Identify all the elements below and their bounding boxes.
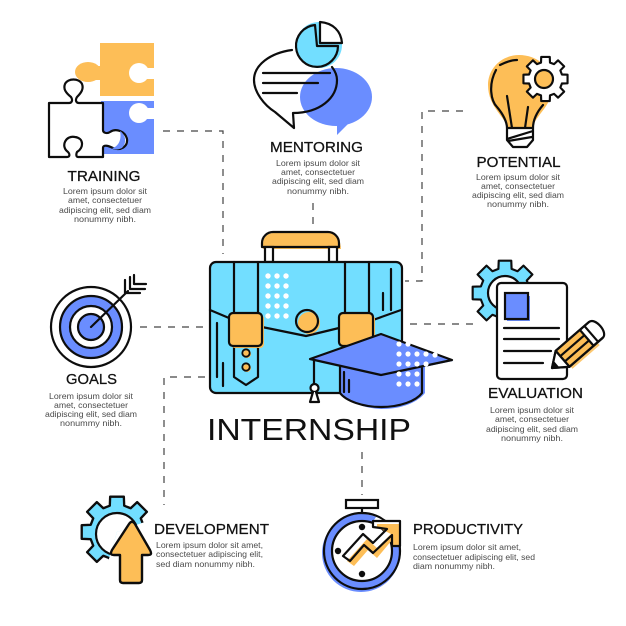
text: development body xyxy=(156,540,263,569)
connector: goals to briefcase xyxy=(140,326,205,328)
text: mentoring body: adipiscing elit, sed diam xyxy=(272,176,364,186)
heading: potential: POTENTIAL xyxy=(476,155,560,171)
connector: training to briefcase xyxy=(163,131,223,254)
heading: evaluation: EVALUATION xyxy=(488,386,583,402)
heading: mentoring: MENTORING xyxy=(270,140,363,156)
text: goals body: adipiscing elit, sed diam xyxy=(45,409,137,419)
connector: mentoring to briefcase xyxy=(312,203,314,228)
text: potential body xyxy=(472,172,564,209)
text: goals body: Lorem ipsum dolor sit xyxy=(49,391,134,401)
connector: productivity to title xyxy=(361,452,363,495)
heading: training: TRAINING xyxy=(68,169,140,185)
icon: training puzzle xyxy=(49,43,155,157)
text: training body: nonummy nibh. xyxy=(74,214,136,224)
text: mentoring body: amet, consectetuer xyxy=(281,167,355,177)
text: potential body: adipiscing elit, sed diam xyxy=(472,190,564,200)
text: evaluation body: amet, consectetuer xyxy=(495,414,569,424)
text: training body xyxy=(59,186,151,224)
pencil xyxy=(545,318,609,379)
text: evaluation body: nonummy nibh. xyxy=(501,433,563,443)
connector: development to briefcase xyxy=(164,377,205,505)
heading: development: DEVELOPMENT xyxy=(154,522,269,538)
icon: development gear and arrow xyxy=(82,497,152,583)
icon: productivity stopwatch xyxy=(322,500,400,592)
text: evaluation body: Lorem ipsum dolor sit xyxy=(490,405,575,415)
icon: central briefcase xyxy=(210,232,402,393)
icon: evaluation gear and document xyxy=(473,261,609,379)
text: development body: sed diam nonummy nibh. xyxy=(156,559,255,569)
text: evaluation body xyxy=(486,405,578,443)
icon: mentoring speech bubbles and pie xyxy=(254,22,372,135)
connector: potential to briefcase xyxy=(405,111,463,281)
icon: goals target xyxy=(51,275,146,367)
text: productivity body: diam nonummy nibh. xyxy=(413,561,495,571)
connector: evaluation to briefcase xyxy=(410,323,478,325)
text: training body: Lorem ipsum dolor sit xyxy=(63,186,148,196)
text: training body: amet, consectetuer xyxy=(68,195,142,205)
text: training body: adipiscing elit, sed diam xyxy=(59,205,151,215)
text: mentoring body xyxy=(272,158,364,196)
cap dots xyxy=(396,341,438,387)
text: goals body xyxy=(45,391,137,428)
text: goals body: amet, consectetuer xyxy=(54,400,128,410)
text: potential body: Lorem ipsum dolor sit xyxy=(476,172,561,182)
text: evaluation body: adipiscing elit, sed diam xyxy=(486,424,578,434)
text: productivity body: consectetuer adipiscing elit, sed xyxy=(413,552,535,562)
text: mentoring body: nonummy nibh. xyxy=(287,186,349,196)
title: INTERNSHIP xyxy=(207,413,411,447)
text: potential body: nonummy nibh. xyxy=(487,199,549,209)
heading: productivity: PRODUCTIVITY xyxy=(413,522,523,538)
heading: goals: GOALS xyxy=(66,372,117,388)
icon: graduation cap xyxy=(310,334,453,409)
text: mentoring body: Lorem ipsum dolor sit xyxy=(276,158,361,168)
icon: potential light bulb with gear xyxy=(488,55,568,147)
text: potential body: amet, consectetuer xyxy=(481,181,555,191)
text: goals body: nonummy nibh. xyxy=(60,418,122,428)
text: development body: Lorem ipsum dolor sit amet, xyxy=(156,540,263,550)
text: development body: consectetuer adipiscing elit, xyxy=(156,549,263,559)
text: productivity body: Lorem ipsum dolor sit amet, xyxy=(413,542,521,552)
text: productivity body xyxy=(413,542,535,571)
briefcase dots xyxy=(265,273,289,319)
